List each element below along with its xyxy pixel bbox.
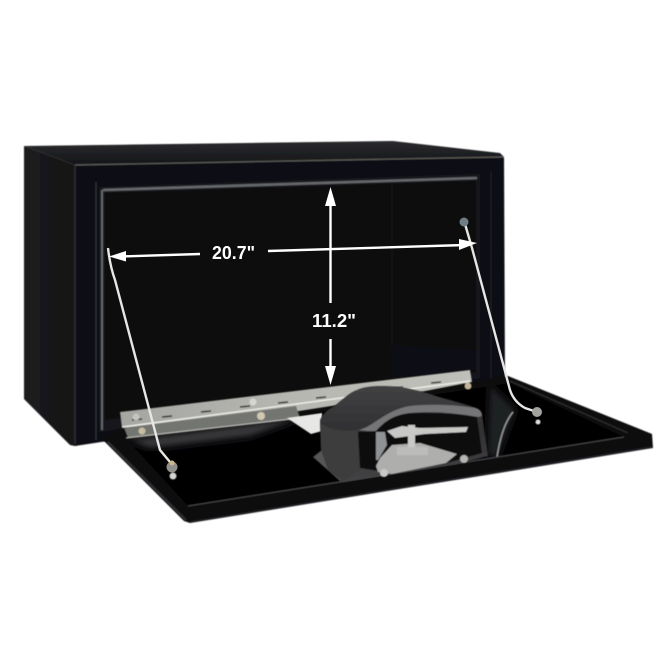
warning label: [287, 413, 322, 434]
latch dark opening: [358, 413, 482, 473]
height label: 11.2": [312, 311, 356, 331]
left side panel: [24, 146, 75, 446]
latch cover: [320, 386, 488, 482]
top panel: [24, 141, 504, 165]
support struts: [108, 218, 542, 480]
width label: 20.7": [212, 243, 255, 263]
height dimension arrow: [325, 187, 336, 385]
right strut bolt: [532, 407, 542, 417]
width dimension arrow: [109, 239, 477, 262]
door opening frame: [99, 174, 480, 432]
latch front face: [320, 423, 360, 481]
latch: [313, 386, 488, 482]
right strut top bolt: [460, 218, 468, 226]
open door tray: [103, 376, 653, 523]
front frame: [75, 157, 505, 446]
stainless hinge: [120, 370, 472, 438]
left strut: [108, 248, 170, 462]
latch mechanism: [376, 432, 387, 460]
toolbox body: [24, 141, 505, 446]
door rim: [103, 376, 653, 523]
right strut: [465, 224, 534, 411]
left strut bolt: [166, 462, 178, 472]
latch base plate: [313, 450, 345, 482]
door inner floor: [128, 383, 624, 506]
floor reflection: [130, 418, 300, 448]
latch arch highlight band: [358, 405, 482, 432]
interior of box: [105, 181, 476, 420]
